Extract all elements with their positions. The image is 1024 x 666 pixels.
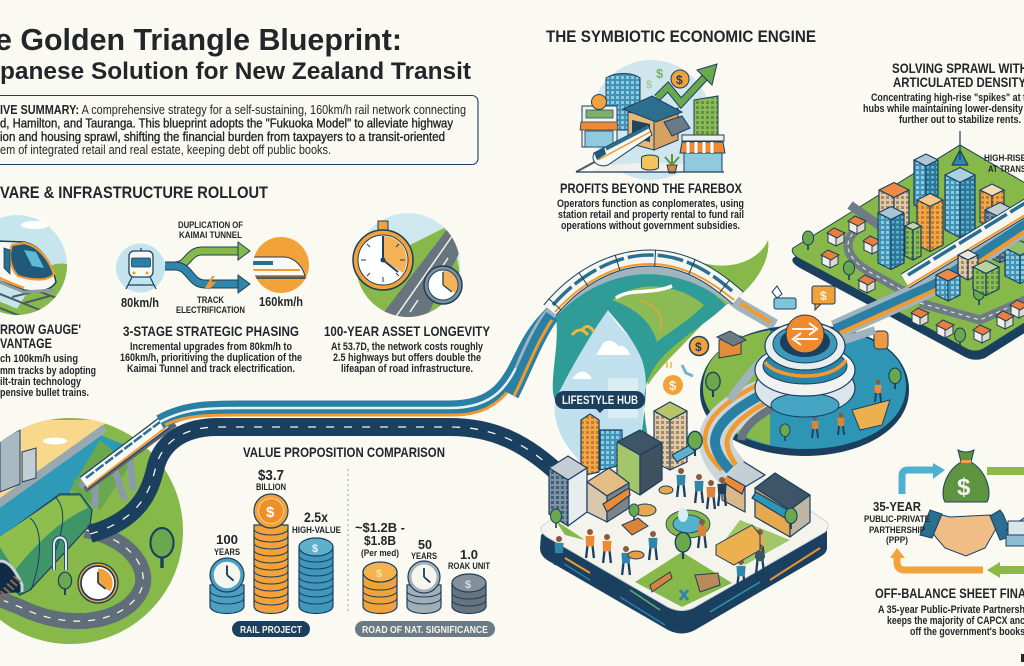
pill: rail project: RAIL PROJECT	[240, 625, 302, 636]
text: PPP label: (PPP)	[886, 535, 908, 545]
stack: $1.2B-$1.8B: ~$1.2B -	[355, 520, 405, 535]
stack: $3.7 billion	[254, 468, 288, 614]
text: profits beyond the farebox: station retail and property rental to fund rail	[558, 209, 744, 221]
text: narrow gauge advantage: RROW GAUGE'	[0, 321, 81, 337]
text: off-balance sheet financing	[875, 585, 1024, 638]
pill: rail project	[232, 621, 310, 637]
labels: phasing diagram: 80km/h	[121, 296, 159, 310]
icon: asset longevity stopwatches	[352, 213, 463, 317]
text: narrow gauge advantage: mm tracks by adopting	[0, 365, 96, 377]
text: solving sprawl	[863, 60, 1024, 126]
label: high-rise at transit	[984, 153, 1024, 174]
executive summary box	[0, 96, 478, 164]
badge: lifestyle hub: LIFESTYLE HUB	[562, 395, 638, 407]
text: asset longevity: 100-YEAR ASSET LONGEVITY	[324, 323, 491, 339]
executive summary box: d, Hamilton, and Tauranga. This blueprint adopts the "Fukuoka Model" to alleviate highway	[0, 116, 454, 130]
corner mark	[1021, 654, 1024, 662]
title: panese Solution for New Zealand Transit	[0, 58, 471, 85]
icon: PPP cycle: $	[957, 474, 971, 501]
text: asset longevity	[324, 323, 491, 375]
labels: phasing diagram	[121, 220, 303, 315]
chart: value proposition rail stacks	[210, 468, 341, 637]
text: PPP label	[864, 499, 930, 545]
text: narrow gauge advantage: pensive bullet trains.	[0, 387, 89, 399]
text: narrow gauge advantage: VANTAGE	[0, 335, 52, 351]
speech icons above hub: $	[820, 289, 827, 303]
stack: $3.7 billion: BILLION	[256, 482, 286, 492]
icon: profits beyond the farebox cluster: $	[656, 66, 664, 81]
text: narrow gauge advantage: ch 100km/h using	[0, 353, 78, 365]
stack: 2.5x high-value: HIGH-VALUE	[292, 525, 341, 536]
text: asset longevity: 2.5 highways but offers double the	[333, 352, 481, 364]
section heading: rollout: VARE & INFRASTRUCTURE ROLLOUT	[0, 184, 268, 202]
executive summary box: ion and housing sprawl, shifting the financial burden from taxpayers to a transit-oriented	[0, 130, 445, 144]
stack: $1.2B-$1.8B	[355, 520, 405, 614]
stack: 1.0 road unit	[448, 547, 490, 614]
plaza people and furniture	[550, 431, 797, 600]
speech icons above hub	[772, 286, 835, 310]
stack: 2.5x high-value: 2.5x	[304, 510, 328, 525]
spire tower	[945, 131, 975, 238]
text: 3-stage strategic phasing: 3-STAGE STRATEGIC PHASING	[123, 323, 299, 339]
foreground low-rise buildings	[936, 250, 999, 301]
title	[0, 22, 471, 85]
text: 3-stage strategic phasing: Kaimai Tunnel and track electrification.	[127, 363, 295, 375]
illustration: lifestyle hub platform	[540, 432, 828, 634]
icon: PPP cycle	[890, 450, 1024, 578]
text: profits beyond the farebox	[557, 180, 744, 232]
text: narrow gauge advantage: ilt-train technology	[0, 376, 82, 388]
text: 3-stage strategic phasing: Incremental upgrades from 80km/h to	[130, 341, 292, 353]
high-rise buildings	[878, 154, 1024, 284]
labels: phasing diagram: ELECTRIFICATION	[176, 305, 245, 315]
icon: narrow gauge train	[0, 215, 70, 320]
road ribbon	[90, 427, 565, 534]
text: 3-stage strategic phasing: 160km/h, prioritiving the duplication of the	[120, 352, 302, 364]
text: asset longevity: lifeapan of road infrastructure.	[341, 363, 473, 375]
text: profits beyond the farebox: PROFITS BEYOND THE FAREBOX	[560, 180, 743, 196]
text: profits beyond the farebox: operations without government subsidies.	[561, 220, 740, 232]
illustration: transit hub plaza	[690, 325, 909, 456]
text: PPP label: 35-YEAR	[873, 499, 922, 514]
labels: phasing diagram: TRACK	[197, 295, 224, 305]
icon: profits beyond the farebox cluster: $	[676, 73, 683, 87]
illustration: swoosh landscape under rail arc	[553, 240, 768, 470]
heading: symbiotic economic engine: THE SYMBIOTIC ECONOMIC ENGINE	[546, 28, 816, 46]
illustration: transit hub plaza: $	[695, 340, 702, 354]
stack: 1.0 road unit: 1.0	[460, 547, 478, 562]
stream from hub to plaza	[705, 378, 805, 472]
stack: 50 years: 50	[418, 537, 432, 552]
icon: lifestyle coin: $	[669, 378, 677, 393]
executive summary box: IVE SUMMARY: A comprehensive strategy for a self-sustaining, 160km/h rail network connecting	[0, 103, 466, 117]
stack: 1.0 road unit: ROAK UNIT	[448, 561, 490, 571]
stack: 100 years: YEARS	[214, 547, 240, 558]
stack: $3.7 billion: $3.7	[258, 468, 284, 484]
executive summary box: em of integrated retail and real estate, keeping debt off public books.	[0, 143, 331, 157]
rail arc with train	[512, 255, 775, 396]
text: PPP label: PARTHERSHIP	[869, 525, 925, 535]
viaduct to the city	[835, 200, 1024, 333]
stack: 2.5x high-value	[292, 510, 341, 614]
labels: phasing diagram: 160km/h	[259, 295, 303, 309]
transit interchange hub	[730, 315, 875, 417]
illustration: city platform	[792, 131, 1024, 360]
chart: value proposition road stacks	[355, 520, 495, 637]
text: narrow gauge advantage	[0, 321, 96, 399]
stack: $1.2B-$1.8B: (Per med)	[361, 548, 399, 558]
icon: profits beyond the farebox cluster: $	[646, 79, 652, 91]
stack: 100 years: 100	[216, 532, 238, 547]
labels: phasing diagram: DUPLICATION OF	[178, 220, 243, 230]
heading: value proposition comparison: VALUE PROPOSITION COMPARISON	[243, 444, 445, 460]
text: profits beyond the farebox: Operators function as conplomerates, using	[557, 198, 744, 210]
badge: lifestyle hub	[555, 391, 645, 413]
text: PPP label: PUBLIC-PRIVATE	[864, 514, 930, 524]
stack: $3.7 billion: $	[266, 504, 275, 521]
divider	[347, 469, 349, 612]
icon: lifestyle coin	[663, 362, 693, 395]
icon: profits beyond the farebox cluster	[576, 60, 725, 180]
illustration: tunnel landscape	[0, 418, 183, 644]
lifestyle buildings	[549, 402, 810, 537]
icon: 80km/h to 160km/h phasing diagram	[116, 237, 309, 293]
title: e Golden Triangle Blueprint:	[0, 22, 402, 57]
stack: 2.5x high-value: $	[312, 543, 318, 555]
stack: $1.2B-$1.8B: $	[376, 568, 382, 580]
text: asset longevity: At 53.7D, the network costs roughly	[331, 341, 484, 353]
rail ribbon	[160, 310, 555, 425]
stack: 50 years	[407, 537, 441, 614]
labels: phasing diagram: KAIMAI TUNNEL	[179, 230, 242, 240]
stack: $1.2B-$1.8B: $1.8B	[364, 533, 396, 548]
pill: road of national significance: ROAD OF NAT. SIGNIFICANCE	[362, 625, 488, 636]
houses and trees	[802, 216, 1024, 347]
stack: 50 years: YEARS	[411, 551, 437, 562]
text: 3-stage strategic phasing	[120, 323, 302, 375]
stack: 100 years	[210, 532, 244, 614]
stack: 1.0 road unit: $	[465, 579, 471, 591]
